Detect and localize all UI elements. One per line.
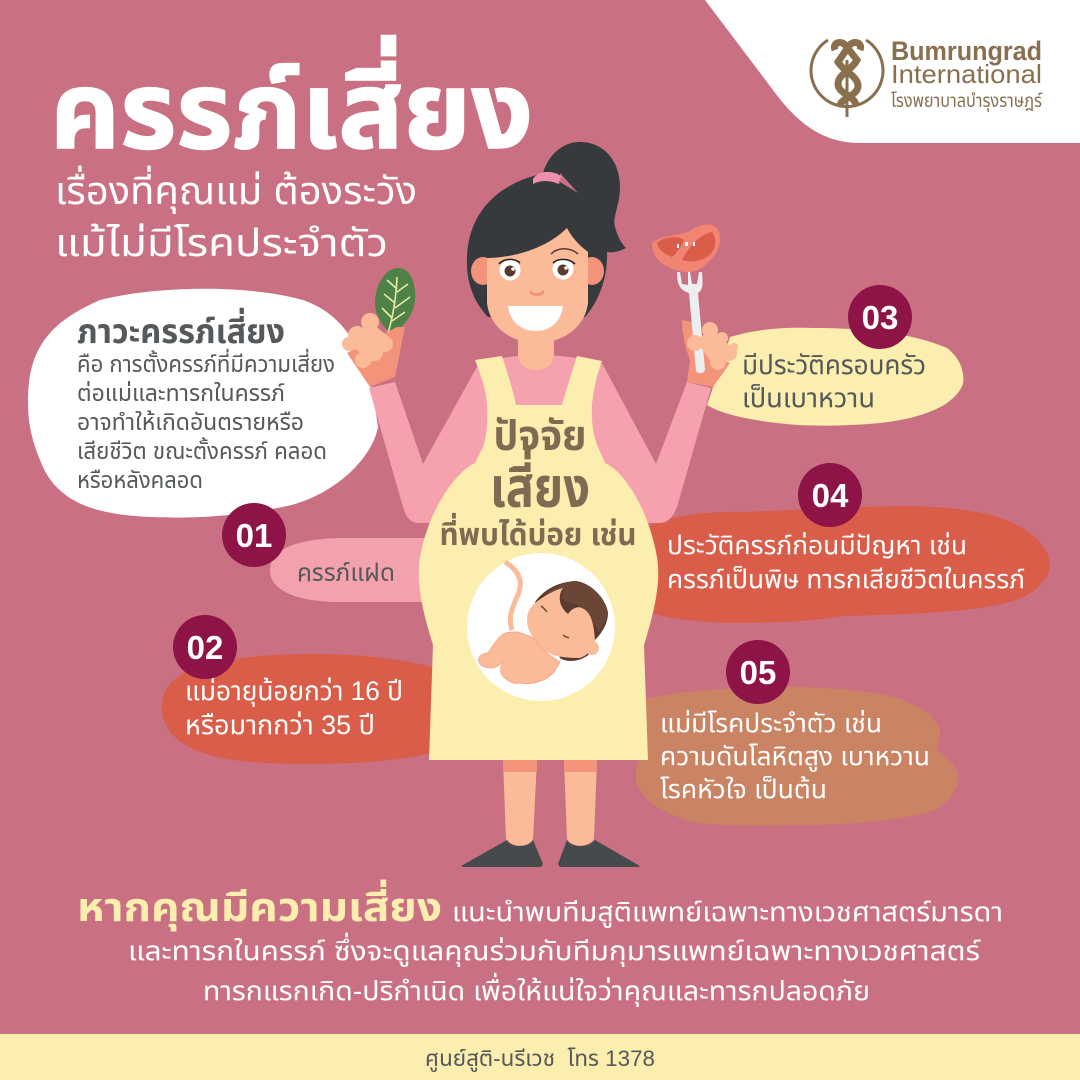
baby closed eyes [541,606,569,638]
apron heading: ที่พบได้บ่อย เช่น [440,512,636,552]
subtitle [55,165,417,265]
womb with baby [467,553,615,701]
apron heading [440,412,636,552]
footer strip [0,1034,1080,1080]
logo text: International [891,59,1042,89]
left fist [342,313,393,368]
ears [471,257,604,285]
text: underlying disease: โรคหัวใจ เป็นต้น [660,774,827,804]
badge 05: 05 [740,654,776,691]
shirt and arms [369,355,711,523]
text: previous pregnancy problems: ครรภ์เป็นพิษ ทารกเสียชีวิตในครรภ์ [667,564,1025,594]
badge 04 [798,463,862,527]
apron heading: เสี่ยง [490,448,590,519]
advice text: แนะนำพบทีมสูติแพทย์เฉพาะทางเวชศาสตร์มารดา [452,897,1003,928]
advice text: หากคุณมีความเสี่ยง [77,879,442,932]
panel 03: family history [707,285,963,426]
text: maternal age [185,676,403,740]
text: underlying disease: ความดันโลหิตสูง เบาหวาน [660,741,930,772]
face [487,228,588,343]
advice text: ทารกแรกเกิด-ปริกำเนิด เพื่อให้แน่ใจว่าคุณและทารกปลอดภัย [203,972,870,1007]
advice text [77,879,1003,1007]
logo text [891,36,1043,112]
subtitle: เรื่องที่คุณแม่ ต้องระวัง [55,165,417,214]
text: family history [742,350,926,413]
badge 02 [173,615,237,679]
left hand with leaf [342,268,415,387]
text block: definition: อาจทำให้เกิดอันตรายหรือ [77,409,304,435]
text: previous pregnancy problems: ประวัติครรภ์ก่อนมีปัญหา เช่น [667,530,967,560]
baby body [479,632,560,684]
right hand with fork and meat [652,224,738,387]
badge 04: 04 [812,477,849,514]
shoes [461,840,640,867]
hair band [533,172,561,184]
text block: definition: หรือหลังคลอด [77,467,203,493]
text block: definition: คือ การตั้งครรภ์ที่มีความเสี่ยง [77,348,335,377]
mouth [508,306,563,331]
baby hair [535,581,608,661]
hair and ponytail [467,142,626,317]
text: previous pregnancy problems [667,530,1025,594]
logo panel: white corner with Bumrungrad logo [705,0,1080,143]
badge 03 [848,285,912,349]
text: twin pregnancy: ครรภ์แฝด [297,559,395,587]
badge 01 [222,503,286,567]
footer strip: ศูนย์สูติ-นรีเวช โทร 1378 [425,1046,655,1072]
text block: definition: ต่อแม่และทารกในครรภ์ [77,380,285,406]
badge 03: 03 [862,299,898,336]
apron heading: ปัจจัย [494,412,586,459]
text: maternal age: หรือมากกว่า 35 ปี [185,710,375,740]
text: maternal age: แม่อายุน้อยกว่า 16 ปี [185,676,403,707]
illustration: pregnant mother [342,142,738,867]
eyes [499,249,578,280]
advice text: และทารกในครรภ์ ซึ่งจะดูแลคุณร่วมกับทีมกุมารแพทย์เฉพาะทางเวชศาสตร์ [128,932,981,967]
heading: definition: ภาวะครรภ์เสี่ยง [77,307,285,351]
badge 01: 01 [236,517,272,554]
panel 01: twin pregnancy [222,503,440,602]
logo text: Bumrungrad [891,36,1042,66]
panel 02: maternal age [162,615,440,764]
text: underlying disease [660,708,930,804]
meat [652,224,720,272]
apron [419,356,658,760]
text: family history: เป็นเบาหวาน [742,383,875,413]
neck [518,330,554,370]
text: family history: มีประวัติครอบครัว [742,350,926,380]
logo text: โรงพยาบาลบำรุงราษฎร์ [891,91,1043,112]
panel 04: previous pregnancy problems [640,463,1050,623]
text block: definition: เสียชีวิต ขณะตั้งครรภ์ คลอด [77,436,327,464]
nose [531,292,543,295]
umbilical cord [505,562,520,630]
neck overlap [518,345,554,370]
baby face [527,588,595,658]
text: underlying disease: แม่มีโรคประจำตัว เช่น [660,708,882,738]
title: ครรภ์เสี่ยง [50,36,533,171]
badge 02: 02 [187,629,223,666]
subtitle: แม้ไม่มีโรคประจำตัว [55,223,388,265]
panel: high-risk pregnancy definition [28,289,378,518]
legs [503,760,597,846]
panel 05: underlying disease [636,640,958,826]
right fist [687,322,738,370]
text block: definition [77,348,335,493]
badge 05 [726,640,790,704]
icon: caduceus emblem [811,40,883,117]
